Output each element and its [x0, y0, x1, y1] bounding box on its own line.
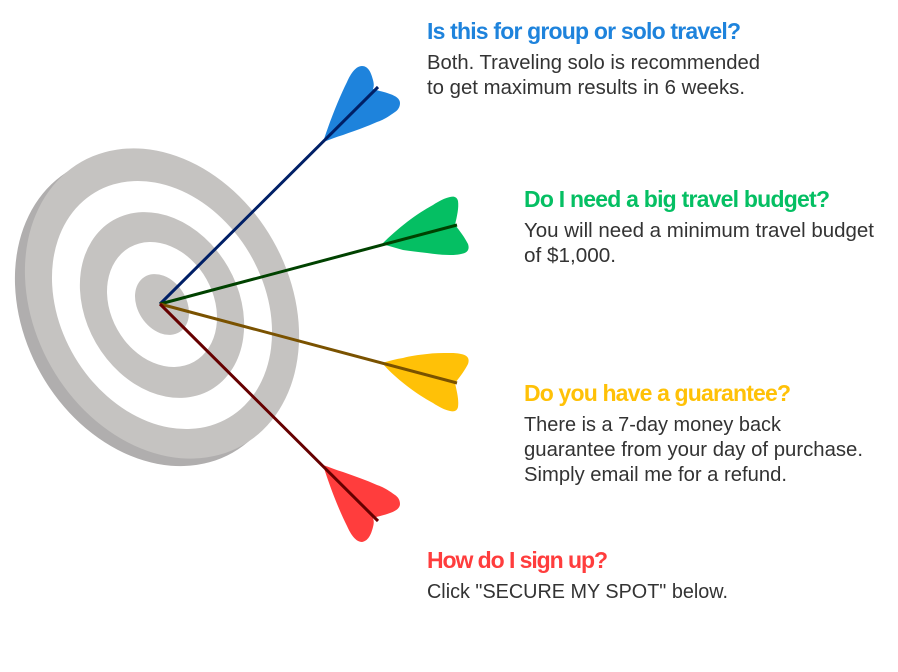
answer: to get maximum results in 6 weeks.	[427, 76, 745, 99]
answer: There is a 7-day money back	[524, 413, 782, 436]
answer: You will need a minimum travel budget	[524, 219, 874, 242]
answer: guarantee from your day of purchase.	[524, 438, 863, 461]
target board	[0, 99, 353, 516]
answer	[524, 219, 874, 267]
answer	[427, 51, 760, 99]
heading: Is this for group or solo travel?	[427, 18, 741, 44]
answer	[524, 413, 863, 486]
blue shaft	[160, 87, 378, 304]
yellow fletching	[382, 353, 469, 411]
green shaft	[160, 225, 457, 304]
board outer ring	[0, 99, 353, 508]
answer: of $1,000.	[524, 244, 616, 267]
heading: Do I need a big travel budget?	[524, 186, 830, 212]
heading: How do I sign up?	[427, 547, 608, 573]
blue fletching	[323, 66, 400, 142]
answer: Both. Traveling solo is recommended	[427, 51, 760, 74]
board inner white ring	[85, 222, 239, 387]
question: guarantee	[524, 380, 863, 486]
question: solo travel	[427, 18, 760, 99]
green fletching	[382, 197, 469, 255]
arrow: red	[160, 304, 400, 542]
board side shadow	[0, 106, 343, 516]
red shaft	[160, 304, 378, 521]
board white ring	[8, 140, 316, 470]
board middle ring	[47, 182, 277, 428]
question: budget	[524, 186, 874, 267]
red fletching	[323, 465, 400, 542]
answer: Simply email me for a refund.	[524, 463, 787, 486]
arrow: green	[160, 197, 469, 304]
arrow: blue	[160, 66, 400, 304]
heading: Do you have a guarantee?	[524, 380, 791, 406]
question: sign up	[427, 547, 728, 603]
arrow: yellow	[160, 304, 469, 411]
yellow shaft	[160, 304, 457, 383]
board bullseye	[124, 264, 200, 345]
answer: Click "SECURE MY SPOT" below.	[427, 580, 728, 603]
